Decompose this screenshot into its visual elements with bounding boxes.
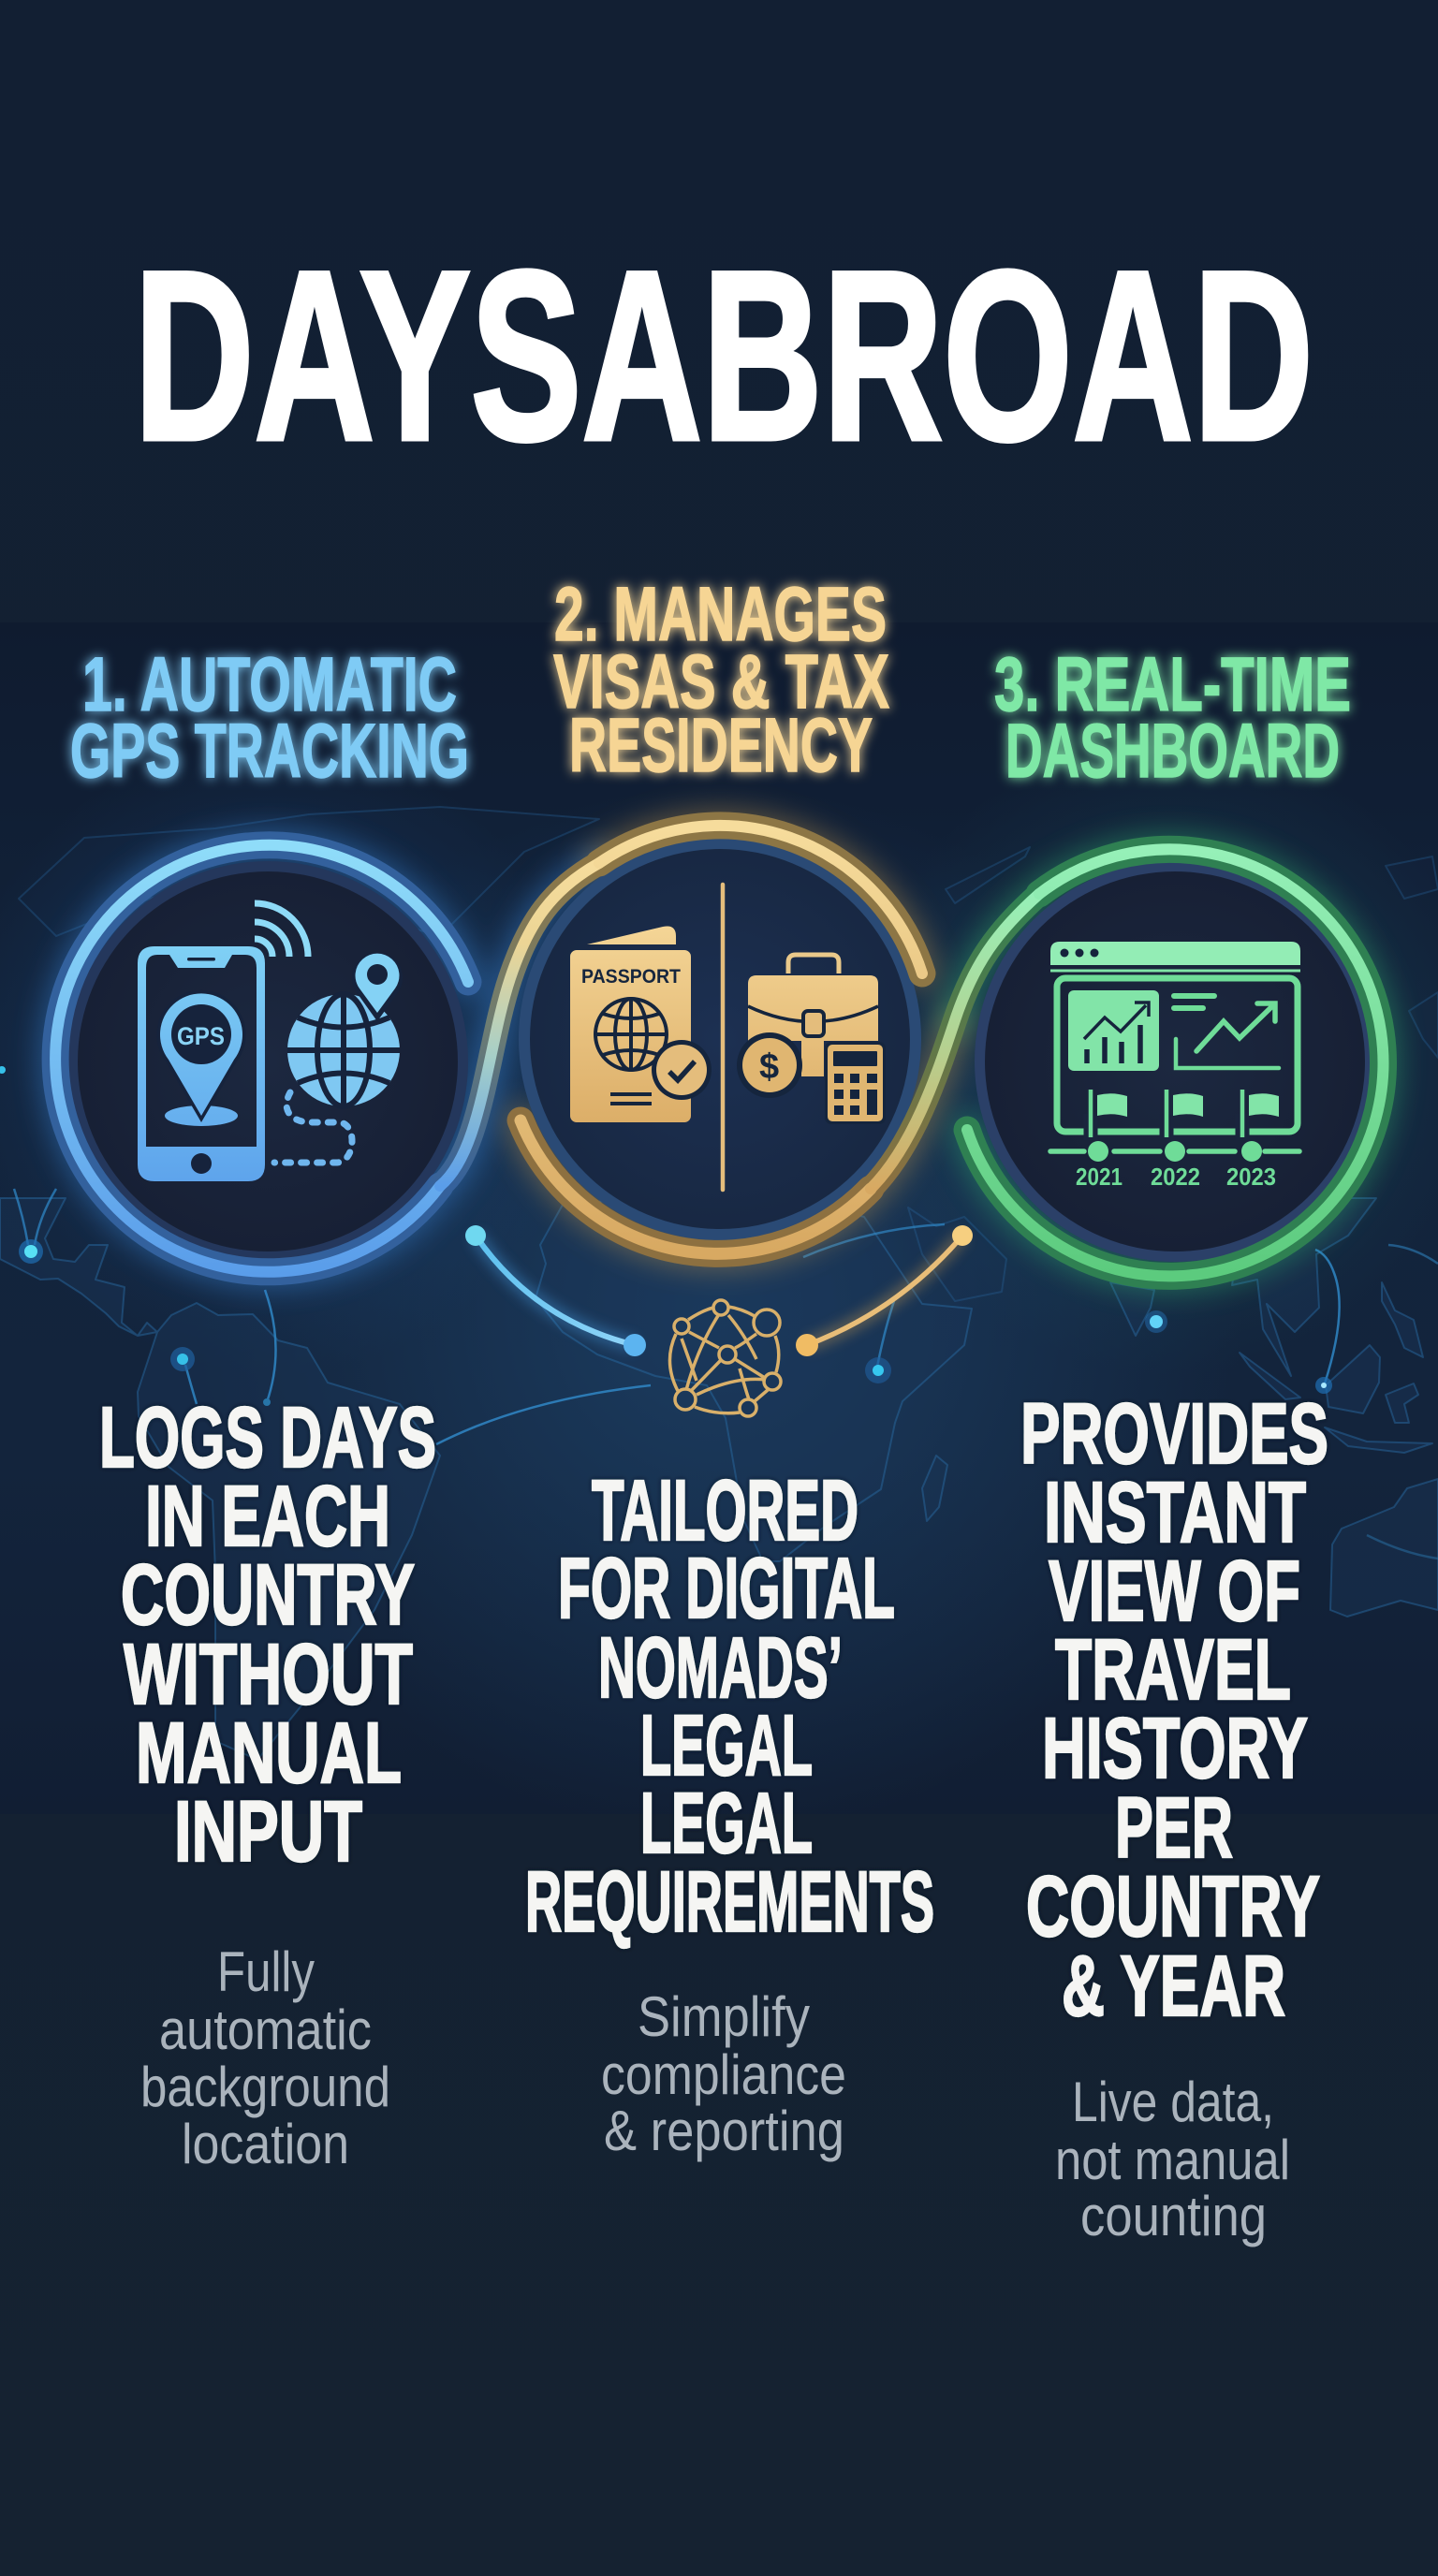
text: logs days (99, 1390, 436, 1880)
note: simplify compliance: & reporting (604, 2100, 844, 2162)
gold connector arrow (796, 1225, 973, 1356)
icon: globe with location pin (287, 954, 400, 1106)
text: provides instant view: HISTORY (1042, 1701, 1308, 1796)
icon: year flags timeline (1050, 1090, 1299, 1191)
text: logs days: MANUAL (136, 1705, 402, 1801)
icon: passport: PASSPORT (581, 965, 681, 988)
icon: phone with GPS pin: GPS (177, 1022, 225, 1050)
text: tailored for digital nomads: LEGAL (640, 1776, 813, 1871)
text: tailored for digital nomads: NOMADS’ (598, 1620, 843, 1716)
text: logs days: INPUT (174, 1784, 362, 1880)
heading: manages visas and tax residency (553, 572, 889, 788)
note: live data: counting (1080, 2185, 1267, 2247)
world map outlines (0, 807, 1438, 1760)
text: tailored for digital nomads: REQUIREMENTS (525, 1854, 934, 1950)
icon: network globe hub (669, 1300, 781, 1416)
text: provides instant view (1020, 1386, 1328, 2034)
text: tailored for digital nomads: TAILORED (592, 1463, 858, 1559)
text: provides instant view: TRAVEL (1055, 1622, 1291, 1718)
icon: phone with GPS pin (138, 946, 265, 1181)
text: logs days: COUNTRY (121, 1547, 415, 1643)
text: tailored for digital nomads: LEGAL (640, 1698, 813, 1793)
heading: real-time dashboard (994, 642, 1351, 794)
divider (721, 885, 725, 1190)
heading: automatic GPS tracking: 1. AUTOMATIC (82, 642, 457, 727)
panel: dashboard circle (975, 861, 1375, 1262)
disc 1 (67, 861, 468, 1262)
note: simplify compliance: Simplify (638, 1985, 810, 2048)
icon: briefcase, coin and calculator: $ (759, 1047, 779, 1087)
icon: briefcase, coin and calculator (737, 955, 886, 1124)
icon: year flags timeline: 2023 (1226, 1163, 1276, 1191)
network routes and nodes (0, 1066, 1438, 1559)
icon: passport (570, 926, 712, 1122)
icon: browser dashboard (1050, 942, 1300, 1132)
note: fully automatic: automatic (159, 1998, 372, 2061)
text: logs days: WITHOUT (124, 1627, 413, 1722)
text: provides instant view: COUNTRY (1026, 1859, 1320, 1954)
note: fully automatic: location (182, 2113, 349, 2175)
note: live data: not manual (1055, 2129, 1290, 2191)
text: provides instant view: VIEW OF (1049, 1544, 1300, 1639)
heading: manages visas and tax residency: VISAS & TAX (553, 639, 889, 724)
text: logs days: LOGS DAYS (99, 1390, 436, 1486)
disc 2 (519, 838, 921, 1240)
note: simplify compliance (601, 1985, 846, 2162)
flowing ring: blue to gold (55, 826, 922, 1272)
text: provides instant view: PER (1115, 1780, 1233, 1876)
note: fully automatic: background (140, 2056, 390, 2118)
heading: automatic GPS tracking (70, 642, 469, 794)
note: live data: Live data, (1072, 2071, 1274, 2133)
icon: year flags timeline: 2022 (1151, 1163, 1200, 1191)
text: tailored for digital nomads (525, 1463, 934, 1950)
disc 3 (975, 861, 1375, 1262)
panel: GPS tracking circle (67, 861, 468, 1262)
note: fully automatic (140, 1940, 390, 2175)
heading: manages visas and tax residency: RESIDENCY (569, 703, 873, 788)
heading: automatic GPS tracking: GPS TRACKING (70, 709, 469, 794)
blue connector arrow (465, 1225, 646, 1356)
text: provides instant view: & YEAR (1062, 1939, 1285, 2034)
icon: year flags timeline: 2021 (1076, 1163, 1123, 1191)
note: live data (1055, 2071, 1290, 2247)
icon: dotted route (274, 1092, 352, 1163)
note: fully automatic: Fully (217, 1940, 315, 2003)
note: simplify compliance: compliance (601, 2043, 846, 2106)
text: logs days: IN EACH (145, 1469, 390, 1564)
text: provides instant view: INSTANT (1044, 1465, 1306, 1560)
text: tailored for digital nomads: FOR DIGITAL (558, 1541, 895, 1636)
icon: signal waves (255, 903, 308, 957)
ring glows (55, 826, 1383, 1276)
panel: visas and tax circle (519, 838, 921, 1240)
flowing ring: gold to green (521, 849, 1383, 1276)
heading: manages visas and tax residency: 2. MANAGES (554, 572, 887, 657)
icon: line chart (1174, 996, 1279, 1068)
